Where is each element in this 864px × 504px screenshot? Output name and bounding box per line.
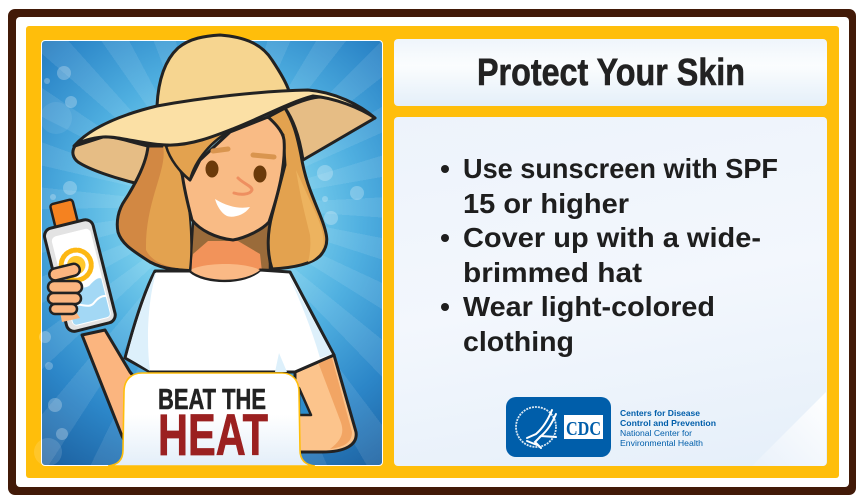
bullet 1 xyxy=(441,153,778,219)
bullet 3: clothing xyxy=(463,326,574,357)
neckline xyxy=(190,264,260,280)
bullet 2: Cover up with a wide- xyxy=(463,222,761,253)
bottle label xyxy=(51,228,112,327)
shirt xyxy=(125,270,334,372)
bullet 3 xyxy=(441,291,715,357)
hand xyxy=(48,263,82,322)
eagle xyxy=(527,410,556,448)
bottle xyxy=(37,196,117,333)
sun core xyxy=(64,253,88,277)
CDC logo xyxy=(506,397,611,457)
panel: body xyxy=(394,117,827,466)
HHS seal ring xyxy=(516,407,556,447)
illustration: woman with hat xyxy=(37,35,375,455)
CDC text block: National Center for xyxy=(620,428,692,438)
CDC text block: Control and Prevention xyxy=(620,418,716,428)
face xyxy=(182,117,284,240)
heat: HEAT xyxy=(158,403,268,468)
CDC text: CDC xyxy=(566,418,601,440)
logo background xyxy=(506,397,611,457)
folded corner xyxy=(752,392,826,466)
bullet 2 xyxy=(441,222,761,288)
bottle waves xyxy=(64,278,111,325)
right hair xyxy=(268,108,327,269)
title: Protect Your Skin xyxy=(477,52,745,94)
CDC text block xyxy=(620,408,716,448)
bottle cap xyxy=(50,199,78,229)
left hair xyxy=(117,146,191,270)
bullet list xyxy=(441,153,778,357)
fringe xyxy=(166,130,232,180)
neck xyxy=(190,222,270,270)
left arm xyxy=(82,330,170,455)
badge shape xyxy=(108,373,315,466)
hat crown xyxy=(157,35,289,106)
torso gap xyxy=(299,388,311,415)
eyebrows xyxy=(213,149,274,157)
bullet 2: brimmed hat xyxy=(463,257,642,288)
left hair highlight xyxy=(146,146,190,269)
smile xyxy=(215,199,250,217)
bullet 1: Use sunscreen with SPF xyxy=(463,153,778,184)
nose xyxy=(234,178,252,194)
badge: beat the heat xyxy=(108,373,315,468)
shirt shading xyxy=(127,273,332,372)
bullet 3: Wear light-colored xyxy=(463,291,715,322)
CDC text block: Centers for Disease xyxy=(620,408,700,418)
sun rays xyxy=(58,247,94,283)
hat underside left xyxy=(73,137,148,183)
wave stripe xyxy=(70,296,107,310)
CDC box xyxy=(564,415,603,439)
illustration background with sun rays xyxy=(41,40,383,466)
neck skin xyxy=(190,241,262,272)
eye right xyxy=(254,166,266,182)
bullet 1: 15 or higher xyxy=(463,188,629,219)
bottle body xyxy=(43,218,117,333)
right arm xyxy=(295,355,356,452)
hat underside right xyxy=(285,97,375,160)
beat the: BEAT THE xyxy=(158,384,266,416)
hat brim xyxy=(74,90,375,146)
panel: title xyxy=(394,39,827,106)
bokeh circles xyxy=(34,66,364,466)
right hair highlight xyxy=(296,170,324,262)
eyes xyxy=(206,160,218,178)
CDC text block: Environmental Health xyxy=(620,438,703,448)
right arm shade xyxy=(318,358,352,449)
